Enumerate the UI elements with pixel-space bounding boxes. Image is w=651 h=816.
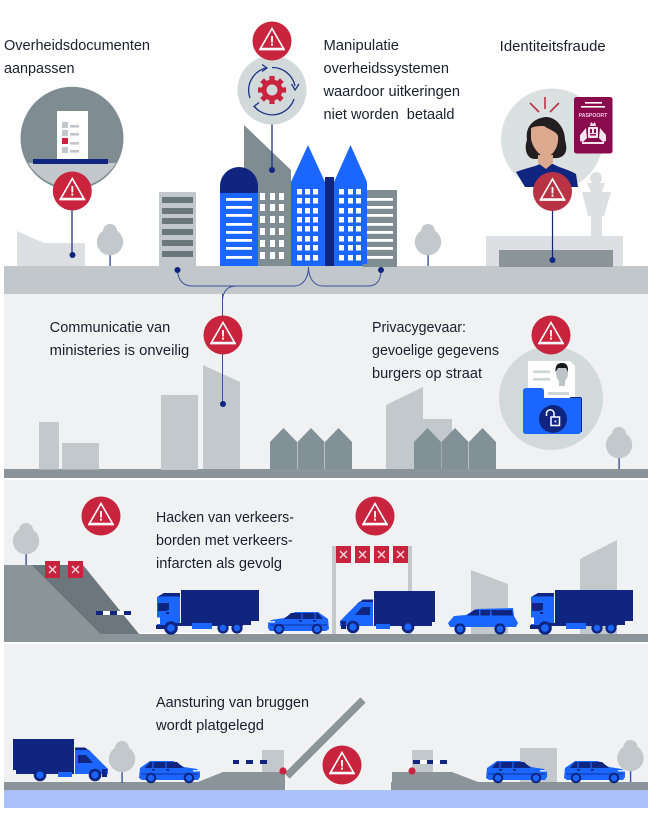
truck: [530, 590, 633, 635]
heading: overheidsdocumenten: aanpassen: [4, 61, 74, 77]
icon: document circle: [20, 87, 124, 190]
ground: [4, 469, 648, 478]
building: low left: [17, 231, 85, 266]
houses: middle: [270, 428, 352, 469]
bridge control right: [412, 750, 447, 772]
heading: identiteitsfraude: Identiteitsfraude: [500, 39, 606, 55]
tree: [606, 427, 632, 469]
icon: passport: [574, 97, 612, 154]
car: [268, 612, 329, 634]
building: airport terminal: [486, 172, 623, 267]
ground top: [4, 266, 648, 294]
tree: [415, 224, 441, 266]
connector: document: [70, 205, 76, 258]
tree: [109, 741, 135, 783]
heading: hacken: borden met verkeers-: [156, 533, 293, 549]
connector: buildings network: [174, 267, 384, 300]
heading: overheidsdocumenten: Overheidsdocumenten: [4, 38, 150, 54]
heading: privacygevaar: gevoelige gegevens: [372, 343, 499, 359]
heading: manipulatie: niet worden betaald: [324, 107, 454, 123]
panel: verkeer: [4, 496, 648, 642]
warning: privacy: [532, 316, 570, 354]
connector: gear to building: [269, 122, 275, 173]
heading: communicatie: Communicatie van: [50, 320, 170, 336]
building: [520, 748, 557, 782]
icon: woman circle: [501, 88, 603, 190]
heading: manipulatie: overheidssystemen: [324, 61, 449, 77]
warning: hill: [82, 496, 120, 536]
tree: [13, 523, 39, 565]
tree: [617, 740, 644, 782]
signs: hill: [45, 561, 83, 578]
building: blue dome: [220, 167, 258, 266]
car: [486, 761, 547, 783]
road: [4, 632, 648, 642]
warning: document: [53, 172, 92, 210]
car: pickup: [448, 608, 518, 635]
tree: [97, 224, 123, 266]
panel: communicatie en privacy: [4, 294, 648, 478]
warning: gantry: [356, 496, 394, 536]
hill: [4, 565, 139, 634]
building: striped grey: [159, 192, 196, 266]
buildings: background: [471, 540, 617, 634]
left road and ramp: [4, 772, 285, 790]
building: right striped: [363, 190, 397, 267]
heading: manipulatie: waardoor uitkeringen: [322, 84, 460, 100]
car: [139, 761, 200, 783]
warning: identity: [533, 172, 572, 211]
heading: aansturing: Aansturing van bruggen: [156, 695, 309, 711]
heading: communicatie: ministeries is onveilig: [50, 343, 189, 359]
building: pointed grey with windows: [244, 125, 291, 266]
hinge right: [408, 767, 416, 775]
building: blue tower left: [291, 145, 325, 266]
warning: bridge: [322, 746, 362, 784]
connector: identity: [550, 205, 556, 263]
heading: privacygevaar: burgers op straat: [372, 366, 482, 382]
heading: privacygevaar: Privacygevaar:: [372, 320, 466, 336]
connector: communicatie: [220, 294, 226, 407]
heading: hacken: infarcten als gevolg: [156, 556, 282, 572]
buildings: left light: [39, 365, 240, 470]
panel: bruggen: [4, 695, 648, 808]
icon: folder circle: [499, 346, 603, 450]
gantry: [332, 546, 412, 634]
right road and ramp: [391, 772, 648, 790]
water: [4, 790, 648, 808]
building: blue tower right: [334, 145, 367, 266]
truck: [340, 591, 435, 633]
car: [564, 761, 625, 783]
icon: passport: PASPOORT: [579, 113, 608, 119]
panel: stad en overheid: [4, 22, 648, 300]
icon: gear circle: [238, 56, 306, 124]
truck: [13, 739, 108, 781]
truck: [156, 590, 259, 635]
heading: aansturing: wordt platgelegd: [155, 718, 264, 734]
houses: right: [414, 428, 496, 469]
buildings: right light: [386, 387, 452, 469]
warning: gear: [252, 22, 292, 60]
building: dark column: [325, 177, 334, 266]
raised bridge deck: [287, 700, 363, 776]
bridge control left: [233, 750, 284, 772]
hinge left: [279, 767, 287, 775]
heading: hacken: Hacken van verkeers-: [156, 510, 294, 526]
barrier: [96, 611, 131, 615]
heading: manipulatie: Manipulatie: [324, 38, 399, 54]
warning: communicatie: [204, 316, 242, 354]
